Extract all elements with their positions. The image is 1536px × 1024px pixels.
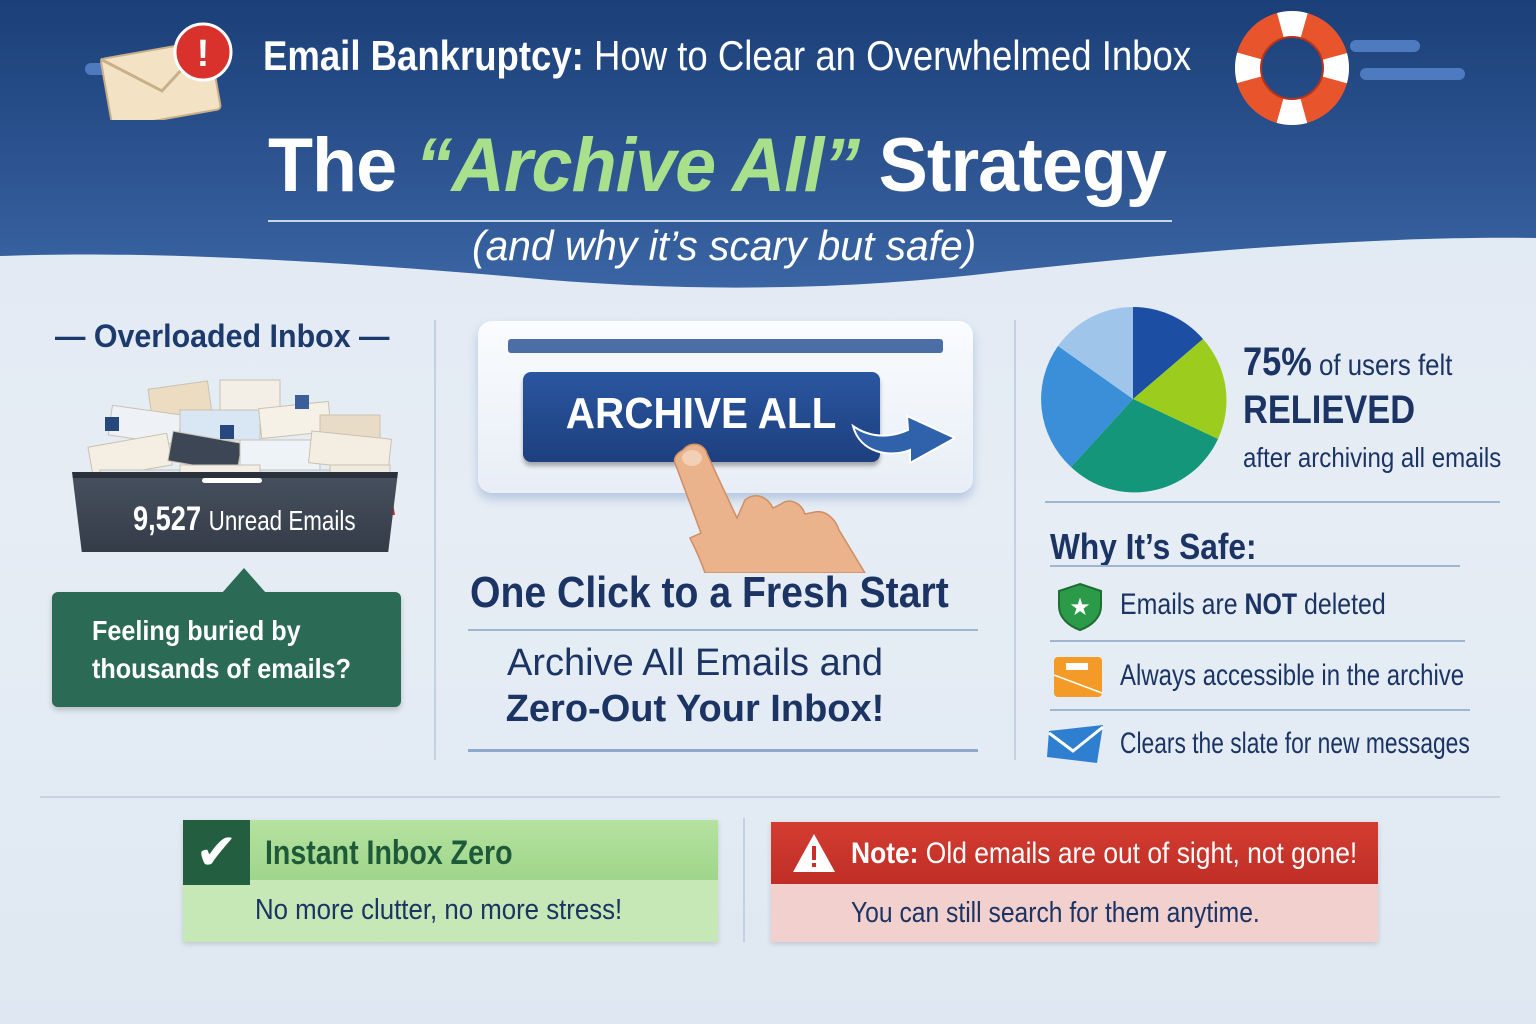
button: archive all: ARCHIVE ALL (566, 389, 837, 438)
callout: feeling buried: thousands of emails? (92, 653, 351, 684)
title: Email Bankruptcy: How to Clear an Overwhelmed Inbox (263, 32, 1191, 79)
panel: overloaded inbox (50, 318, 404, 712)
panel: archive all button (468, 321, 978, 752)
callout: instant inbox zero: Instant Inbox Zero (265, 834, 513, 872)
arrow: curved right (851, 414, 955, 464)
callout: note (771, 822, 1378, 942)
panel: stats and safety (1041, 307, 1501, 763)
icon: envelope with alert (100, 22, 232, 120)
text: 75% relieved: RELIEVED (1243, 388, 1415, 432)
item: not deleted (1058, 583, 1386, 632)
callout: instant inbox zero (183, 820, 718, 942)
box: unread count: 9,527 Unread Emails (133, 500, 356, 538)
callout: instant inbox zero: No more clutter, no more stress! (255, 894, 622, 926)
callout: feeling buried (52, 592, 401, 707)
button: archive all (523, 372, 880, 462)
text: archive all emails: Archive All Emails and (507, 642, 883, 684)
icon: lifebuoy (1235, 11, 1349, 125)
text: 75% relieved (1243, 340, 1501, 473)
icon: check: ✔ (196, 823, 237, 881)
item: clears slate: Clears the slate for new messages (1120, 727, 1470, 760)
icon: shield (1058, 583, 1102, 632)
icon: check (183, 820, 250, 885)
icon: pointing hand (674, 444, 866, 573)
main heading: The “Archive All” Strategy (268, 123, 1166, 208)
item: accessible: Always accessible in the archive (1120, 659, 1464, 692)
box: unread count (72, 472, 398, 552)
callout: note: Note: Old emails are out of sight, not gone! (851, 837, 1357, 870)
pie chart (1041, 307, 1226, 492)
header background (0, 0, 1536, 288)
callout: note: You can still search for them anytime. (851, 897, 1260, 929)
button frame (478, 321, 973, 493)
item: accessible (1054, 657, 1464, 697)
item: not deleted: Emails are NOT deleted (1120, 588, 1386, 621)
heading: why it's safe: Why It’s Safe: (1050, 526, 1257, 567)
icon: blue envelope (1047, 725, 1104, 763)
icon: shield: ★ (1069, 594, 1091, 621)
icon: warning (793, 834, 835, 872)
text: 75% relieved: 75% of users felt (1243, 340, 1452, 384)
text: archive all emails: Zero-Out Your Inbox! (506, 688, 884, 730)
subtitle: (and why it’s scary but safe) (472, 222, 976, 269)
illustration: email pile (88, 380, 395, 515)
heading: overloaded inbox: — Overloaded Inbox — (55, 318, 389, 354)
heading: one click: One Click to a Fresh Start (470, 568, 949, 617)
text: 75% relieved: after archiving all emails (1243, 442, 1501, 473)
callout: feeling buried: Feeling buried by (92, 615, 301, 646)
text: archive all emails (506, 642, 884, 730)
icon: envelope with alert: ! (197, 33, 209, 75)
icon: orange folder (1054, 657, 1102, 697)
